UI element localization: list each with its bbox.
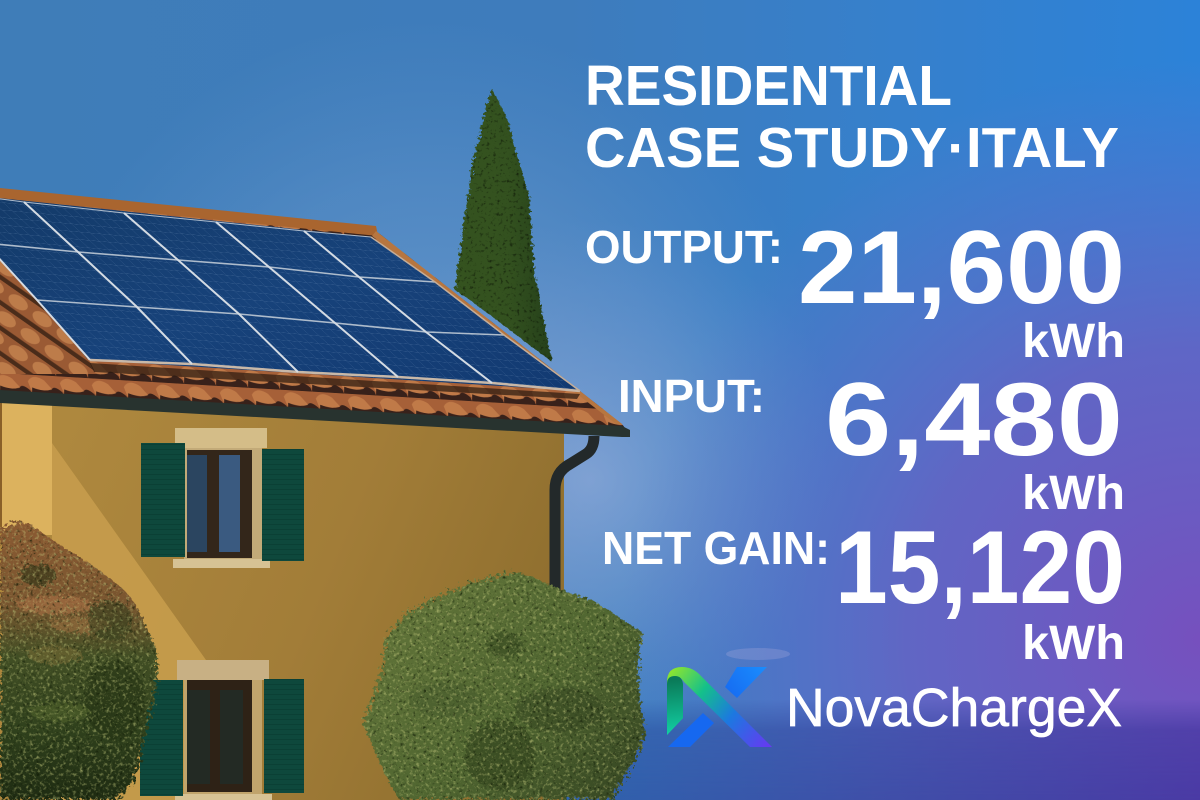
roof tiles: [0, 188, 628, 432]
sunlit wall diagonal: [52, 443, 250, 800]
metric: input: [618, 362, 1125, 520]
metric: net gain: NET GAIN:: [602, 522, 830, 574]
metric: input: 6,480: [825, 362, 1123, 478]
window lower: [140, 660, 304, 800]
right shutter: [264, 679, 304, 793]
brand name: NovaChargeX: [786, 678, 1122, 738]
left shrub: [0, 522, 157, 800]
cypress tree: [455, 88, 552, 362]
title: RESIDENTIAL: [585, 54, 952, 118]
left shutter: [140, 680, 183, 796]
metric: input: kWh: [1022, 467, 1125, 520]
solar panel array: [0, 195, 580, 399]
ridge: [0, 188, 378, 236]
olive tree: [363, 572, 645, 800]
sunlit pillar: [2, 400, 52, 535]
house wall: [0, 395, 564, 800]
metric: output: [585, 210, 1125, 368]
metric: output: 21,600: [798, 210, 1125, 326]
right shutter: [262, 449, 304, 561]
title: CASE STUDY·ITALY: [585, 116, 1119, 180]
metric: net gain: kWh: [1022, 617, 1125, 670]
window upper: [141, 428, 304, 568]
icon: NovaChargeX logo mark: [667, 667, 772, 747]
metric: input: INPUT:: [618, 370, 765, 422]
left shutter: [141, 443, 185, 557]
metric: net gain: [602, 510, 1125, 670]
gutter and downpipe: [0, 390, 630, 605]
metric: net gain: 15,120: [835, 510, 1125, 626]
metric: output: kWh: [1022, 315, 1125, 368]
metric: output: OUTPUT:: [585, 221, 783, 273]
title: [585, 54, 1119, 180]
